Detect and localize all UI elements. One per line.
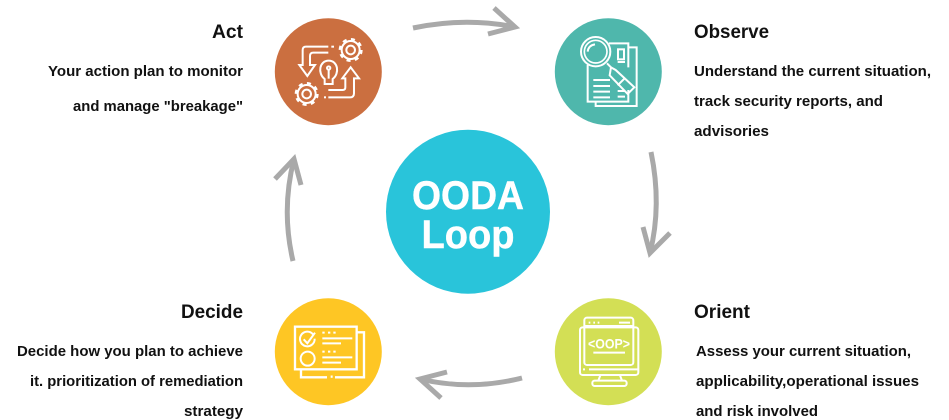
text block: observe description: track security reports, and xyxy=(694,93,883,110)
heading: Observe: Observe xyxy=(694,22,769,43)
icon: monitor with code window: <OOP> xyxy=(588,335,630,351)
text block: act description: Your action plan to monitor xyxy=(48,63,243,80)
icon: gears, bulb and arrows xyxy=(296,39,361,105)
heading: Act: Act xyxy=(212,22,244,43)
text block: orient description: Assess your current situation, xyxy=(696,343,911,360)
icon: magnifier over documents xyxy=(581,37,637,106)
text block: observe description xyxy=(694,63,931,140)
arrow: act to observe xyxy=(413,8,515,34)
heading: Decide: Decide xyxy=(181,302,243,323)
panel: orient circle with icon xyxy=(555,298,662,405)
panel: observe circle with icon xyxy=(555,18,662,125)
text block: orient description: and risk involved xyxy=(696,403,818,420)
center circle: OODA Loop: Loop xyxy=(422,213,514,257)
center circle: OODA Loop: OODA xyxy=(412,174,524,218)
text block: observe description: advisories xyxy=(694,123,769,140)
text block: decide description: it. prioritization of remediation xyxy=(30,373,243,390)
text block: act description: and manage "breakage" xyxy=(73,98,243,115)
icon: checklist cards xyxy=(295,327,364,377)
text block: orient description xyxy=(696,343,919,420)
text block: decide description: Decide how you plan to achieve xyxy=(17,343,243,360)
text block: decide description: strategy xyxy=(184,403,244,420)
center circle: OODA Loop xyxy=(386,130,550,294)
arrow: decide to act xyxy=(275,159,301,261)
arrow: orient to decide xyxy=(420,372,522,398)
text block: observe description: Understand the current situation, xyxy=(694,63,931,80)
panel: act circle with icon xyxy=(275,18,382,125)
text block: act description xyxy=(48,63,243,115)
text block: orient description: applicability,operational issues xyxy=(696,373,919,390)
arrow: observe to orient xyxy=(643,152,670,253)
text block: decide description xyxy=(17,343,244,420)
heading: Orient: Orient xyxy=(694,302,751,323)
panel: decide circle with icon xyxy=(275,298,382,405)
